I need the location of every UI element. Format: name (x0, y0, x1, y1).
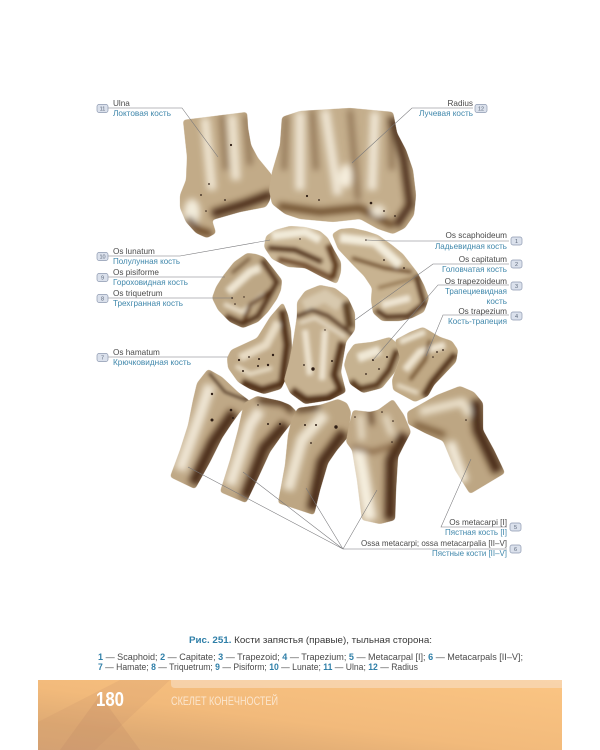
bone: metacarpal II (346, 399, 411, 524)
label: radius: 12 (478, 106, 484, 112)
label: hamate: 7 (101, 356, 104, 362)
bone: trapezoid (344, 337, 401, 393)
footer band (38, 680, 562, 750)
bone: trapezium (392, 327, 458, 402)
label: capitate (442, 255, 522, 274)
bone: metacarpal I (407, 386, 505, 494)
label: lunate: Os lunatum (113, 247, 155, 256)
section title: СКЕЛЕТ КОНЕЧНОСТЕЙ (171, 693, 278, 708)
label: hamate (97, 348, 191, 367)
label: ulna: Локтовая кость (113, 109, 171, 118)
label: triquetrum: Os triquetrum (113, 289, 163, 298)
caption: 7 — Hamate; 8 — Triquetrum; 9 — Pisiform; 10 — Lunate; 11 — Ulna; 12 — Radius (98, 662, 419, 672)
label: trapezoid (445, 277, 522, 306)
label: metacarpals II-V: Ossa metacarpi; ossa metacarpalia [II–V] (361, 539, 507, 548)
label: hamate: Крючковидная кость (113, 358, 191, 367)
label: trapezium (448, 307, 522, 326)
bone: radius (269, 108, 416, 234)
bone: metacarpal IV (220, 396, 297, 503)
label: ulna (97, 99, 171, 118)
bone: metacarpal V (170, 369, 251, 489)
label: lunate (97, 247, 180, 266)
label: lunate: Полулунная кость (113, 257, 180, 266)
label: capitate: 2 (515, 262, 518, 268)
label: scaphoid: Os scaphoideum (446, 231, 507, 240)
illustration: wrist bones (170, 108, 505, 524)
label: trapezoid: Os trapezoideum (445, 277, 507, 286)
label: radius: Лучевая кость (419, 109, 473, 118)
label: ulna: Ulna (113, 99, 130, 108)
label: trapezoid: Трапециевидная (445, 287, 507, 296)
bone: scaphoid (332, 228, 429, 321)
label: radius (419, 99, 487, 118)
caption: 1 — Scaphoid; 2 — Capitate; 3 — Trapezoid; 4 — Trapezium; 5 — Metacarpal [I]; 6 — Metacarpals [II–V]; (98, 652, 523, 662)
bone: lunate (264, 226, 341, 284)
bone: triquetrum and pisiform (212, 253, 282, 328)
label: hamate: Os hamatum (113, 348, 160, 357)
label: pisiform: 9 (101, 276, 104, 282)
label: trapezoid: 3 (515, 284, 518, 290)
label: metacarpals II-V: 6 (514, 547, 517, 553)
label: scaphoid: 1 (515, 239, 518, 245)
label: trapezium: Кость-трапеция (448, 317, 507, 326)
label: pisiform: Гороховидная кость (113, 278, 188, 287)
label: radius: Radius (448, 99, 473, 108)
label: pisiform: Os pisiforme (113, 268, 159, 277)
bone: ulna (180, 112, 272, 238)
leader lines (108, 108, 509, 549)
label: triquetrum (97, 289, 183, 308)
caption (98, 635, 523, 672)
label: metacarpals II-V: Пястные кости [II–V] (432, 549, 507, 558)
label: triquetrum: Трехгранная кость (113, 299, 183, 308)
label: trapezoid: кость (487, 297, 507, 306)
label: lunate: 10 (99, 254, 106, 260)
page number: 180 (96, 689, 124, 711)
label: trapezium: Os trapezium (458, 307, 507, 316)
label: ulna: 11 (100, 106, 105, 112)
label: pisiform (97, 268, 188, 287)
label: metacarpals II-V (361, 539, 521, 558)
label: metacarpal I: Пястная кость [I] (445, 528, 507, 537)
label: scaphoid: Ладьевидная кость (435, 242, 507, 251)
label: capitate: Os capitatum (459, 255, 507, 264)
label: trapezium: 4 (515, 314, 518, 320)
label: scaphoid (435, 231, 522, 251)
label: metacarpal I (445, 518, 521, 537)
label: metacarpal I: 5 (514, 525, 517, 531)
bone: metacarpal III (278, 399, 351, 515)
caption: Рис. 251. Кости запястья (правые), тыльная сторона: (189, 635, 432, 645)
bone: hamate (227, 302, 292, 394)
label: capitate: Головчатая кость (442, 265, 507, 274)
label: metacarpal I: Os metacarpi [I] (449, 518, 507, 527)
label: triquetrum: 8 (101, 296, 104, 302)
bone: capitate (284, 285, 355, 404)
